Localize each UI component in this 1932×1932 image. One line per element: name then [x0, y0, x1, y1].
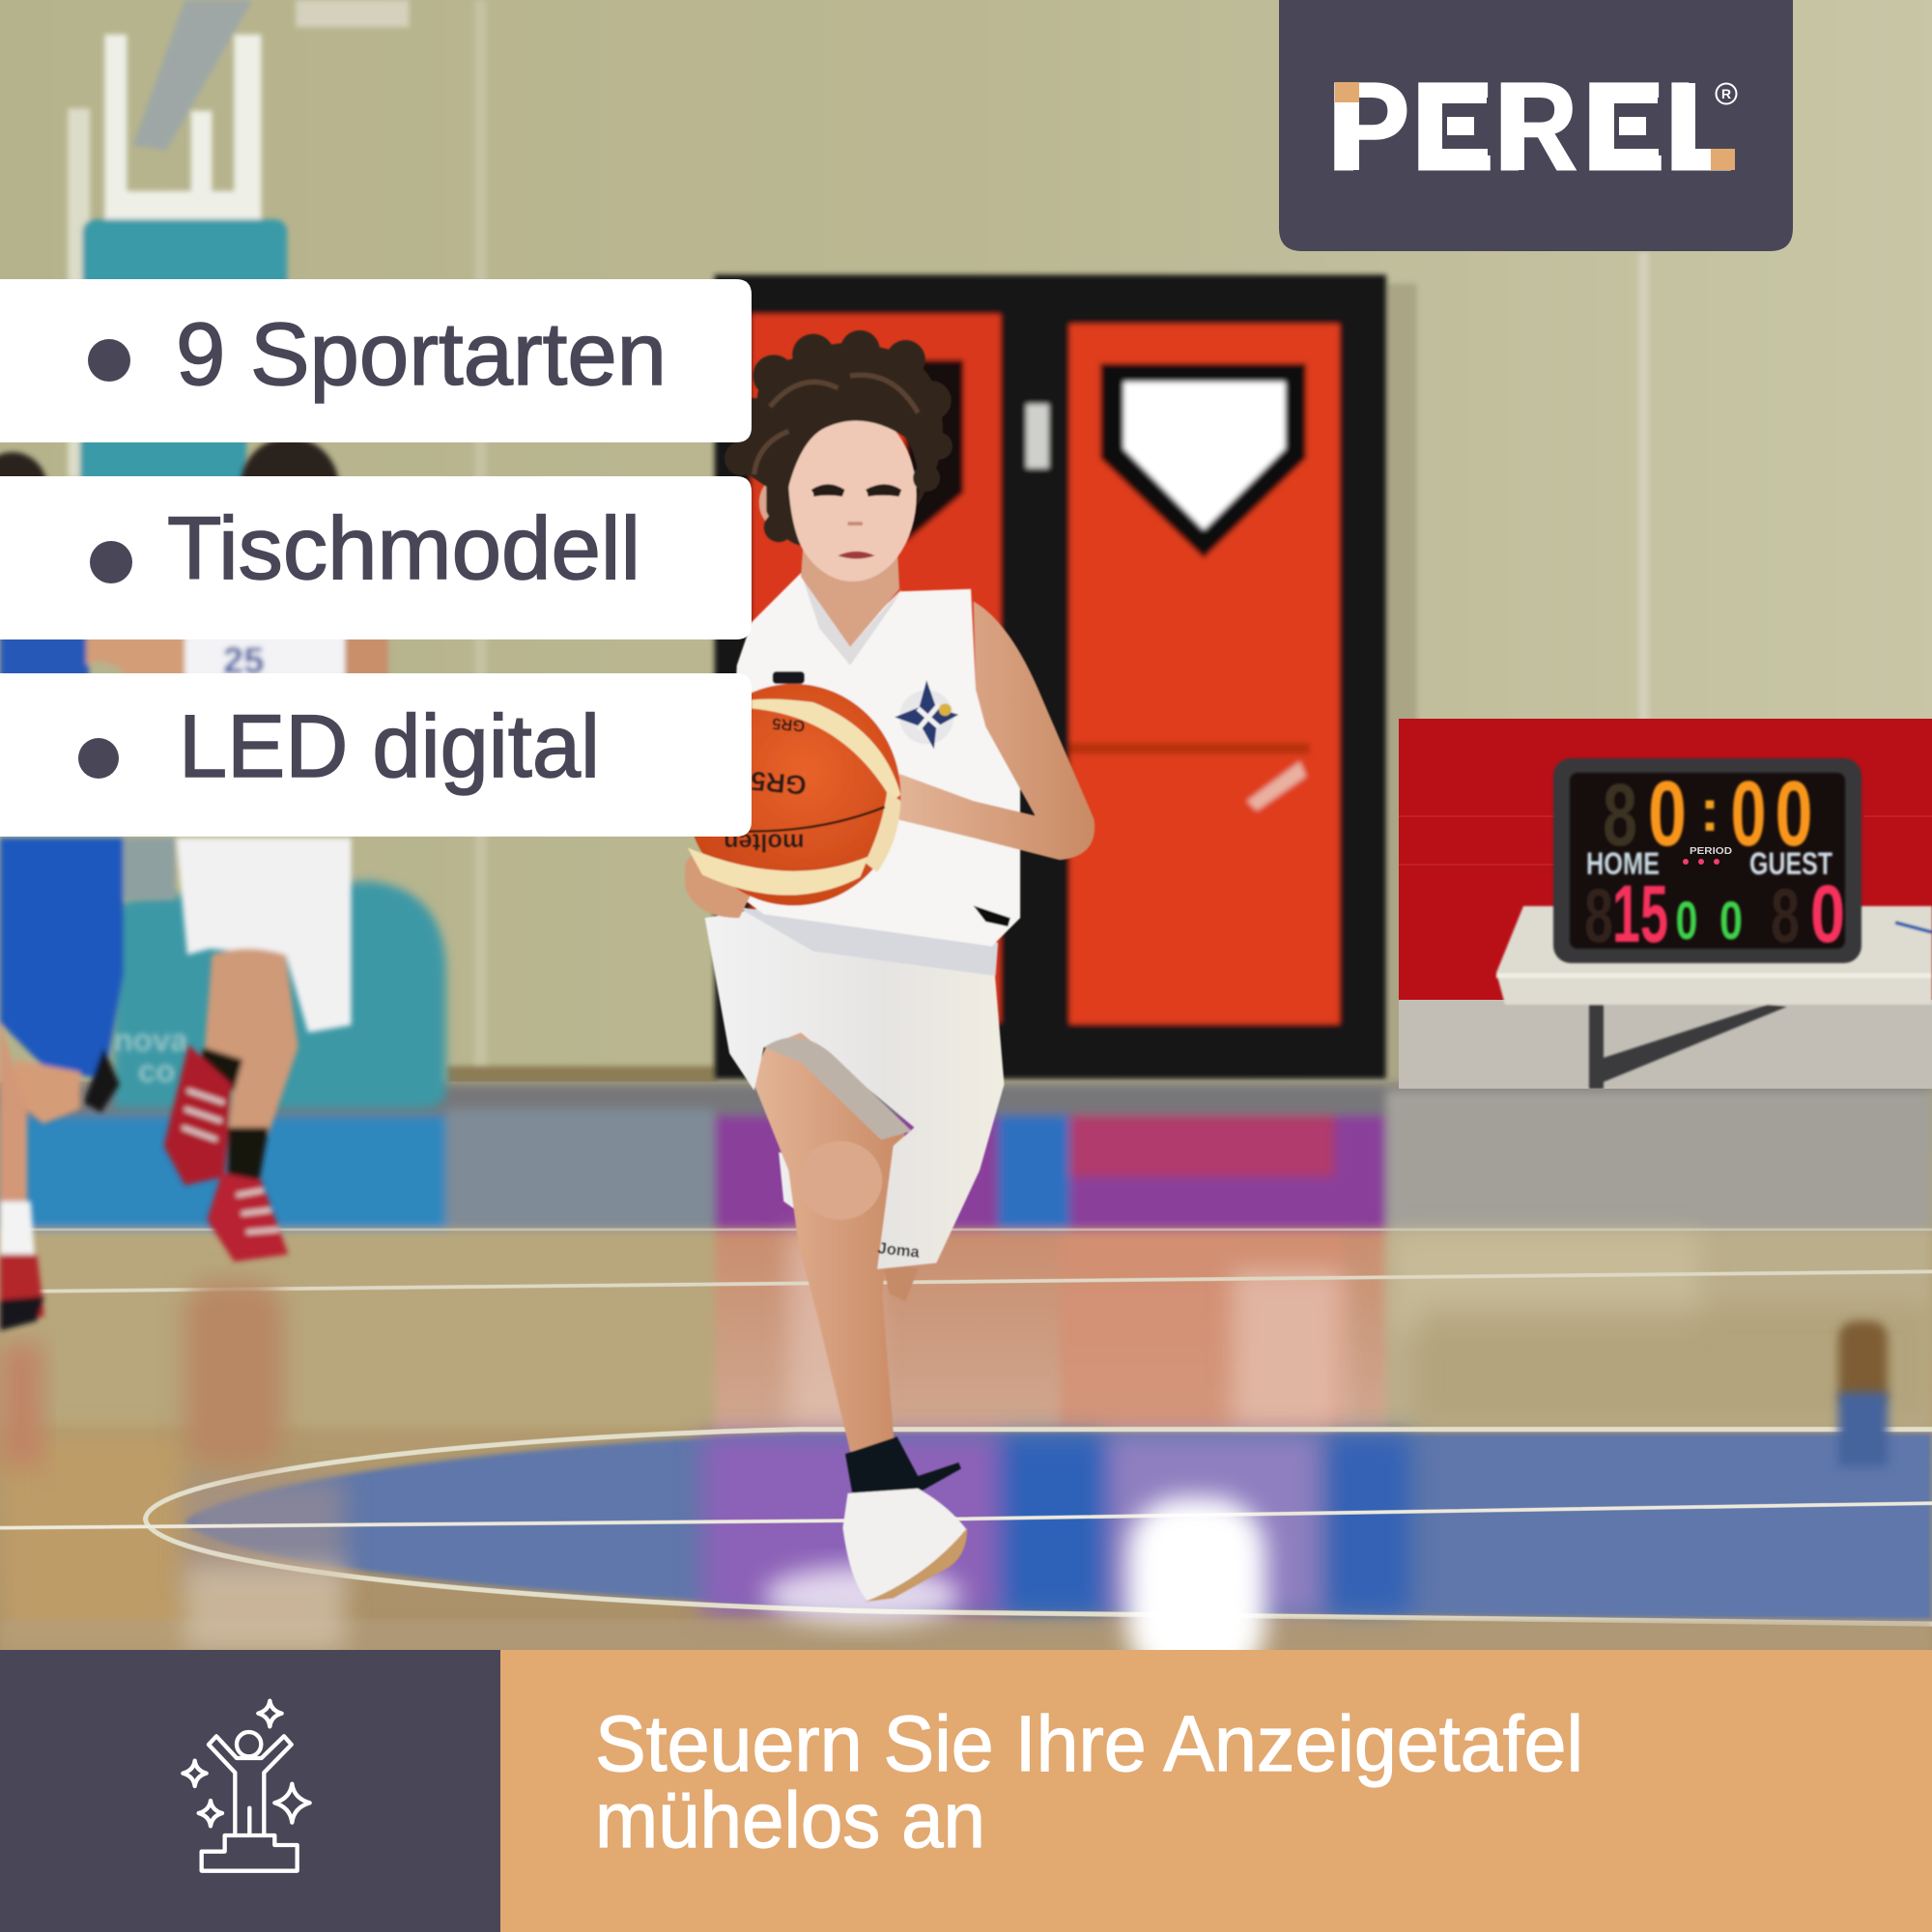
unlit digit segments: 8 [1771, 872, 1800, 958]
label: 9 Sportarten [176, 305, 667, 404]
teal wall pad: nova [113, 1023, 188, 1059]
scoreboard housing [1553, 758, 1861, 963]
scoreboard text [1586, 779, 1845, 945]
registered mark [1716, 83, 1737, 104]
period lamps [1683, 859, 1719, 865]
background players: 25 [223, 639, 264, 681]
basketball [686, 684, 900, 905]
scoreboard text: : [1700, 778, 1719, 844]
logo orange accent bottom [1711, 149, 1735, 170]
caption text [595, 1700, 1583, 1864]
main player: Joma [877, 1238, 922, 1262]
jersey logo [895, 680, 958, 750]
caption text: mühelos an [595, 1776, 985, 1864]
table [1496, 906, 1932, 1089]
inset photo: LED scoreboard on table [1399, 719, 1932, 1089]
bottom icon panel [0, 1650, 500, 1932]
bottom caption panel [500, 1650, 1932, 1932]
floor reflections [0, 1282, 1888, 1682]
wordmark block forms [1335, 83, 1713, 170]
feature card: LED digital [0, 673, 752, 837]
bullet [90, 541, 132, 583]
scoreboard text: 0 [1776, 762, 1812, 866]
PEREL wordmark: L [1664, 55, 1734, 197]
back leg [881, 1257, 918, 1301]
PEREL wordmark: PE [1326, 55, 1494, 197]
main player [685, 330, 1094, 1602]
feature card: 9 Sportarten [0, 279, 752, 442]
unlit digit segments: 8 [1603, 766, 1637, 865]
basketball: molten [724, 829, 805, 856]
basketball hoop stand [68, 0, 409, 480]
torso jersey [727, 573, 1020, 947]
unlit digit segments [1585, 782, 1799, 943]
front leg [754, 1023, 905, 1452]
caption text: Steuern Sie Ihre Anzeigetafel [595, 1700, 1583, 1788]
PEREL wordmark [1326, 55, 1734, 197]
background players [0, 438, 388, 1331]
PEREL wordmark: E [1581, 55, 1665, 197]
PEREL wordmark: R [1493, 55, 1578, 197]
scoreboard text: HOME [1586, 846, 1660, 881]
near arm [897, 601, 1094, 860]
scoreboard text: 0 [1719, 890, 1743, 951]
bullet [78, 738, 119, 779]
unlit digit segments: 8 [1584, 872, 1613, 958]
registered mark: R [1721, 86, 1731, 101]
logo panel [1279, 0, 1793, 251]
shorts [705, 905, 1005, 1269]
scoreboard text: PERIOD [1690, 846, 1732, 857]
icon: winner on podium with sparkles [183, 1701, 310, 1871]
scoreboard text: GUEST [1749, 846, 1833, 881]
red doors with black frame [715, 274, 1386, 1079]
scoreboard text: 0 [1810, 868, 1845, 959]
neck and face [801, 542, 899, 647]
court floor [0, 1082, 1932, 1655]
basketball: GR5 [771, 714, 806, 735]
scoreboard text: 0 [1648, 762, 1687, 866]
court lines and center circle [0, 1230, 1932, 1654]
feature card: Tischmodell [0, 476, 752, 639]
label: Tischmodell [167, 499, 640, 598]
scoreboard text: 15 [1612, 868, 1668, 959]
curly hair [724, 330, 952, 546]
bullet [88, 339, 130, 382]
teal wall pad [113, 881, 446, 1109]
scoreboard text: 0 [1675, 890, 1698, 951]
teal wall pad: co [138, 1054, 176, 1090]
gym wall [0, 0, 1932, 1096]
basketball: GR5 [750, 766, 808, 800]
logo orange accent top [1335, 82, 1359, 102]
label: LED digital [179, 697, 600, 796]
shoe [842, 1436, 967, 1602]
scoreboard text: 0 [1731, 762, 1766, 866]
